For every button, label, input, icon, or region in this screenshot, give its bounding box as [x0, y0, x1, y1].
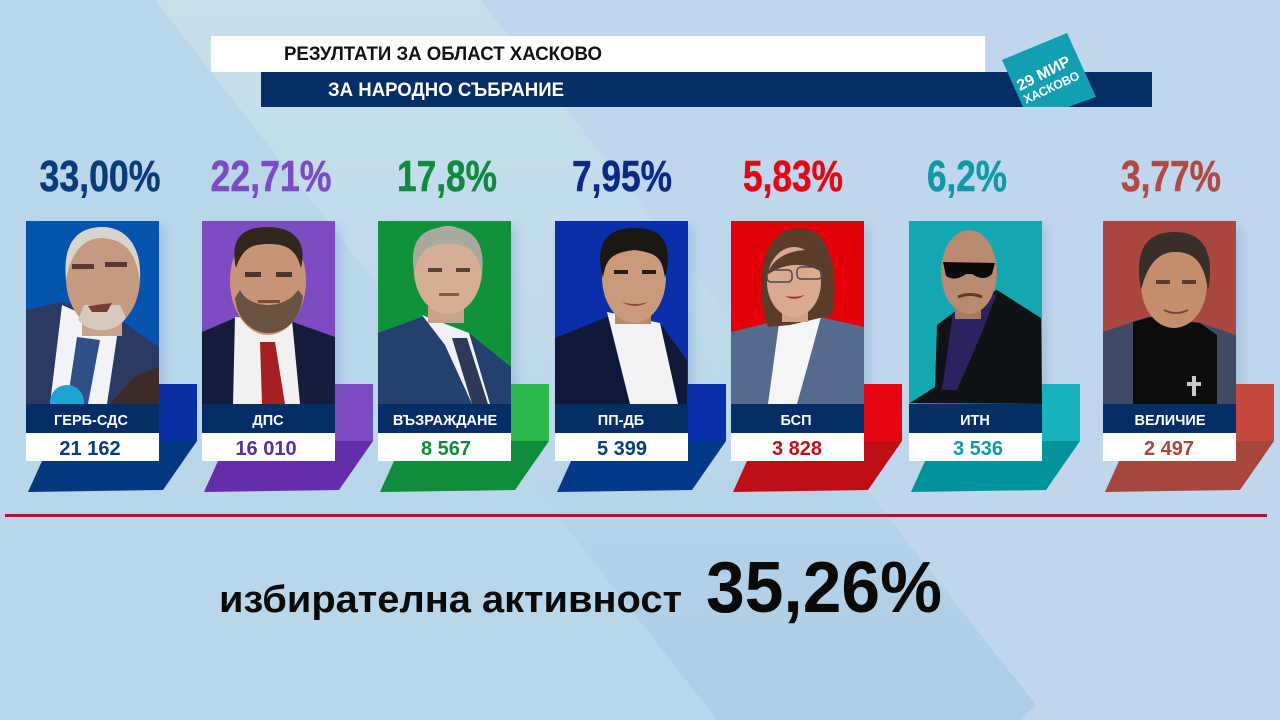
votes [26, 433, 159, 461]
ribbon [557, 384, 726, 492]
percentage: 6,2% [927, 152, 1007, 201]
candidate: БСП [731, 152, 902, 492]
percentage: 3,77% [1121, 152, 1221, 201]
ribbon [911, 384, 1080, 492]
party label: ГЕРБ-СДС [54, 413, 128, 429]
party label [202, 404, 335, 433]
party label [731, 404, 864, 433]
subtitle bar: national assembly: ЗА НАРОДНО СЪБРАНИЕ [328, 79, 564, 101]
votes: 8 567 [421, 438, 471, 460]
candidate: ВЕЛИЧИЕ [1103, 152, 1274, 492]
portrait [26, 221, 159, 419]
portrait [202, 221, 335, 404]
turnout [219, 548, 942, 628]
turnout label: избирателна активност [219, 579, 682, 621]
party label [555, 404, 688, 433]
party label [378, 404, 511, 433]
party label: ПП-ДБ [598, 413, 644, 429]
votes [909, 433, 1042, 461]
votes [731, 433, 864, 461]
votes [555, 433, 688, 461]
party label [26, 404, 159, 433]
ribbon [28, 384, 197, 492]
ribbon [380, 384, 549, 492]
portrait [555, 221, 688, 404]
candidate: ДПС [202, 152, 373, 492]
badge: 29 MIR Haskovo: 29 МИР [1014, 53, 1073, 95]
candidate: ИТН [909, 152, 1080, 492]
badge: 29 MIR Haskovo: ХАСКОВО [1021, 69, 1082, 107]
party label: ВЕЛИЧИЕ [1134, 413, 1206, 429]
votes [1103, 433, 1236, 461]
candidate: ВЪЗРАЖДАНЕ [378, 152, 549, 492]
votes: 3 536 [953, 438, 1003, 460]
portrait [731, 221, 864, 404]
party label [909, 404, 1042, 433]
party label: ВЪЗРАЖДАНЕ [393, 413, 498, 429]
votes: 21 162 [59, 438, 121, 460]
votes: 3 828 [772, 438, 822, 460]
ribbon [1105, 384, 1274, 492]
party label: ИТН [960, 413, 990, 429]
votes [202, 433, 335, 461]
title bar: region results [211, 36, 985, 72]
ribbon [733, 384, 902, 492]
title bar: region results: РЕЗУЛТАТИ ЗА ОБЛАСТ ХАСКОВО [284, 43, 602, 65]
percentage: 22,71% [210, 152, 332, 201]
votes: 2 497 [1144, 438, 1194, 460]
party label [1103, 404, 1236, 433]
turnout value: 35,26% [706, 548, 942, 628]
votes: 16 010 [235, 438, 297, 460]
portrait [909, 221, 1042, 404]
percentage: 17,8% [397, 152, 497, 201]
party label: ДПС [252, 413, 284, 429]
percentage: 33,00% [40, 152, 160, 201]
candidate: ГЕРБ-СДС [26, 152, 197, 492]
percentage: 7,95% [572, 152, 672, 201]
votes: 5 399 [597, 438, 647, 460]
badge: 29 MIR Haskovo [1002, 33, 1096, 107]
portrait [1103, 221, 1236, 404]
header: title bars [211, 33, 1152, 107]
percentage: 5,83% [743, 152, 843, 201]
votes [378, 433, 511, 461]
ribbon [204, 384, 373, 492]
subtitle bar: national assembly [261, 72, 1152, 107]
party label: БСП [780, 413, 812, 429]
portrait [378, 221, 511, 404]
candidate: ПП-ДБ [555, 152, 726, 492]
